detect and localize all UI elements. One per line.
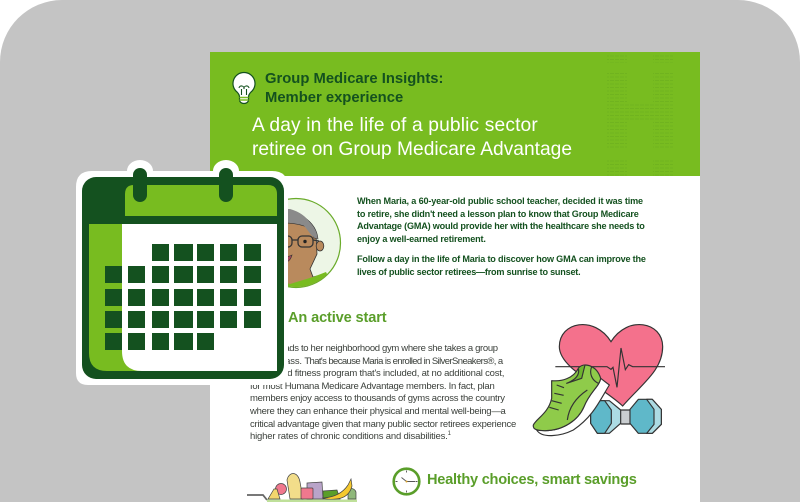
icon: calendar (76, 160, 288, 385)
icon: clock (392, 467, 421, 496)
title: A day in the life of a public sector (252, 115, 538, 136)
calendar frame (82, 177, 284, 379)
title: retiree on Group Medicare Advantage (252, 139, 572, 160)
intro text: When Maria, a 60-year-old public school teacher, decided it was time (357, 196, 643, 206)
intro text: Advantage (GMA) would provide her with the healthcare she needs to (357, 221, 645, 231)
heading: an active start: An active start (288, 310, 386, 326)
intro text: lives of public sector retirees—from sunrise to sunset. (357, 267, 580, 277)
icon: lightbulb (232, 72, 256, 104)
intro text: to retire, she didn't need a lesson plan to know that Group Medicare (357, 209, 639, 219)
calendar date grid (105, 244, 261, 350)
heading: series title: Group Medicare Insights: (265, 71, 443, 87)
portrait: Maria (288, 198, 342, 288)
body text: gym paragraph: health and fitness program that's included, at no additional cost, (250, 368, 504, 379)
body text: gym paragraph: where they can enhance their physical and mental well-being—a (250, 406, 506, 417)
body text: gym paragraph: Maria heads to her neighborhood gym where she takes a group (250, 343, 498, 354)
body text: gym paragraph: critical advantage given that many public sector retirees experience (250, 419, 516, 430)
intro text: Follow a day in the life of Maria to discover how GMA can improve the (357, 254, 646, 264)
body text: gym paragraph: fitness class. That's because Maria is enrolled in SilverSneakers®, a (250, 356, 503, 367)
illustration: heart, shoe and dumbbell (532, 324, 665, 436)
calendar top band (125, 185, 277, 216)
body text: gym paragraph: members enjoy access to thousands of gyms across the country (250, 393, 505, 404)
icon: dumbbell (591, 399, 661, 433)
illustration: grocery basket (247, 473, 357, 502)
body text: gym paragraph (250, 343, 516, 442)
title (252, 115, 572, 160)
body text: gym paragraph: higher rates of chronic conditions and disabilities.1 (250, 431, 451, 442)
icon: running shoe (533, 365, 609, 436)
document page (210, 52, 700, 502)
heading: series title: Member experience (265, 90, 403, 106)
calendar page (122, 224, 277, 371)
intro text (357, 196, 646, 277)
heading: series title (265, 71, 443, 106)
calendar body (89, 224, 277, 371)
calendar rings (133, 168, 233, 202)
heading: healthy choices: Healthy choices, smart savings (427, 472, 637, 488)
decorative H watermark (607, 56, 673, 176)
header banner (210, 52, 700, 176)
body text: gym paragraph: for most Humana Medicare Advantage members. In fact, plan (250, 381, 494, 392)
icon: heart (555, 325, 665, 406)
calendar sticker outline (76, 160, 288, 385)
intro text: enjoy a well-earned retirement. (357, 234, 486, 244)
